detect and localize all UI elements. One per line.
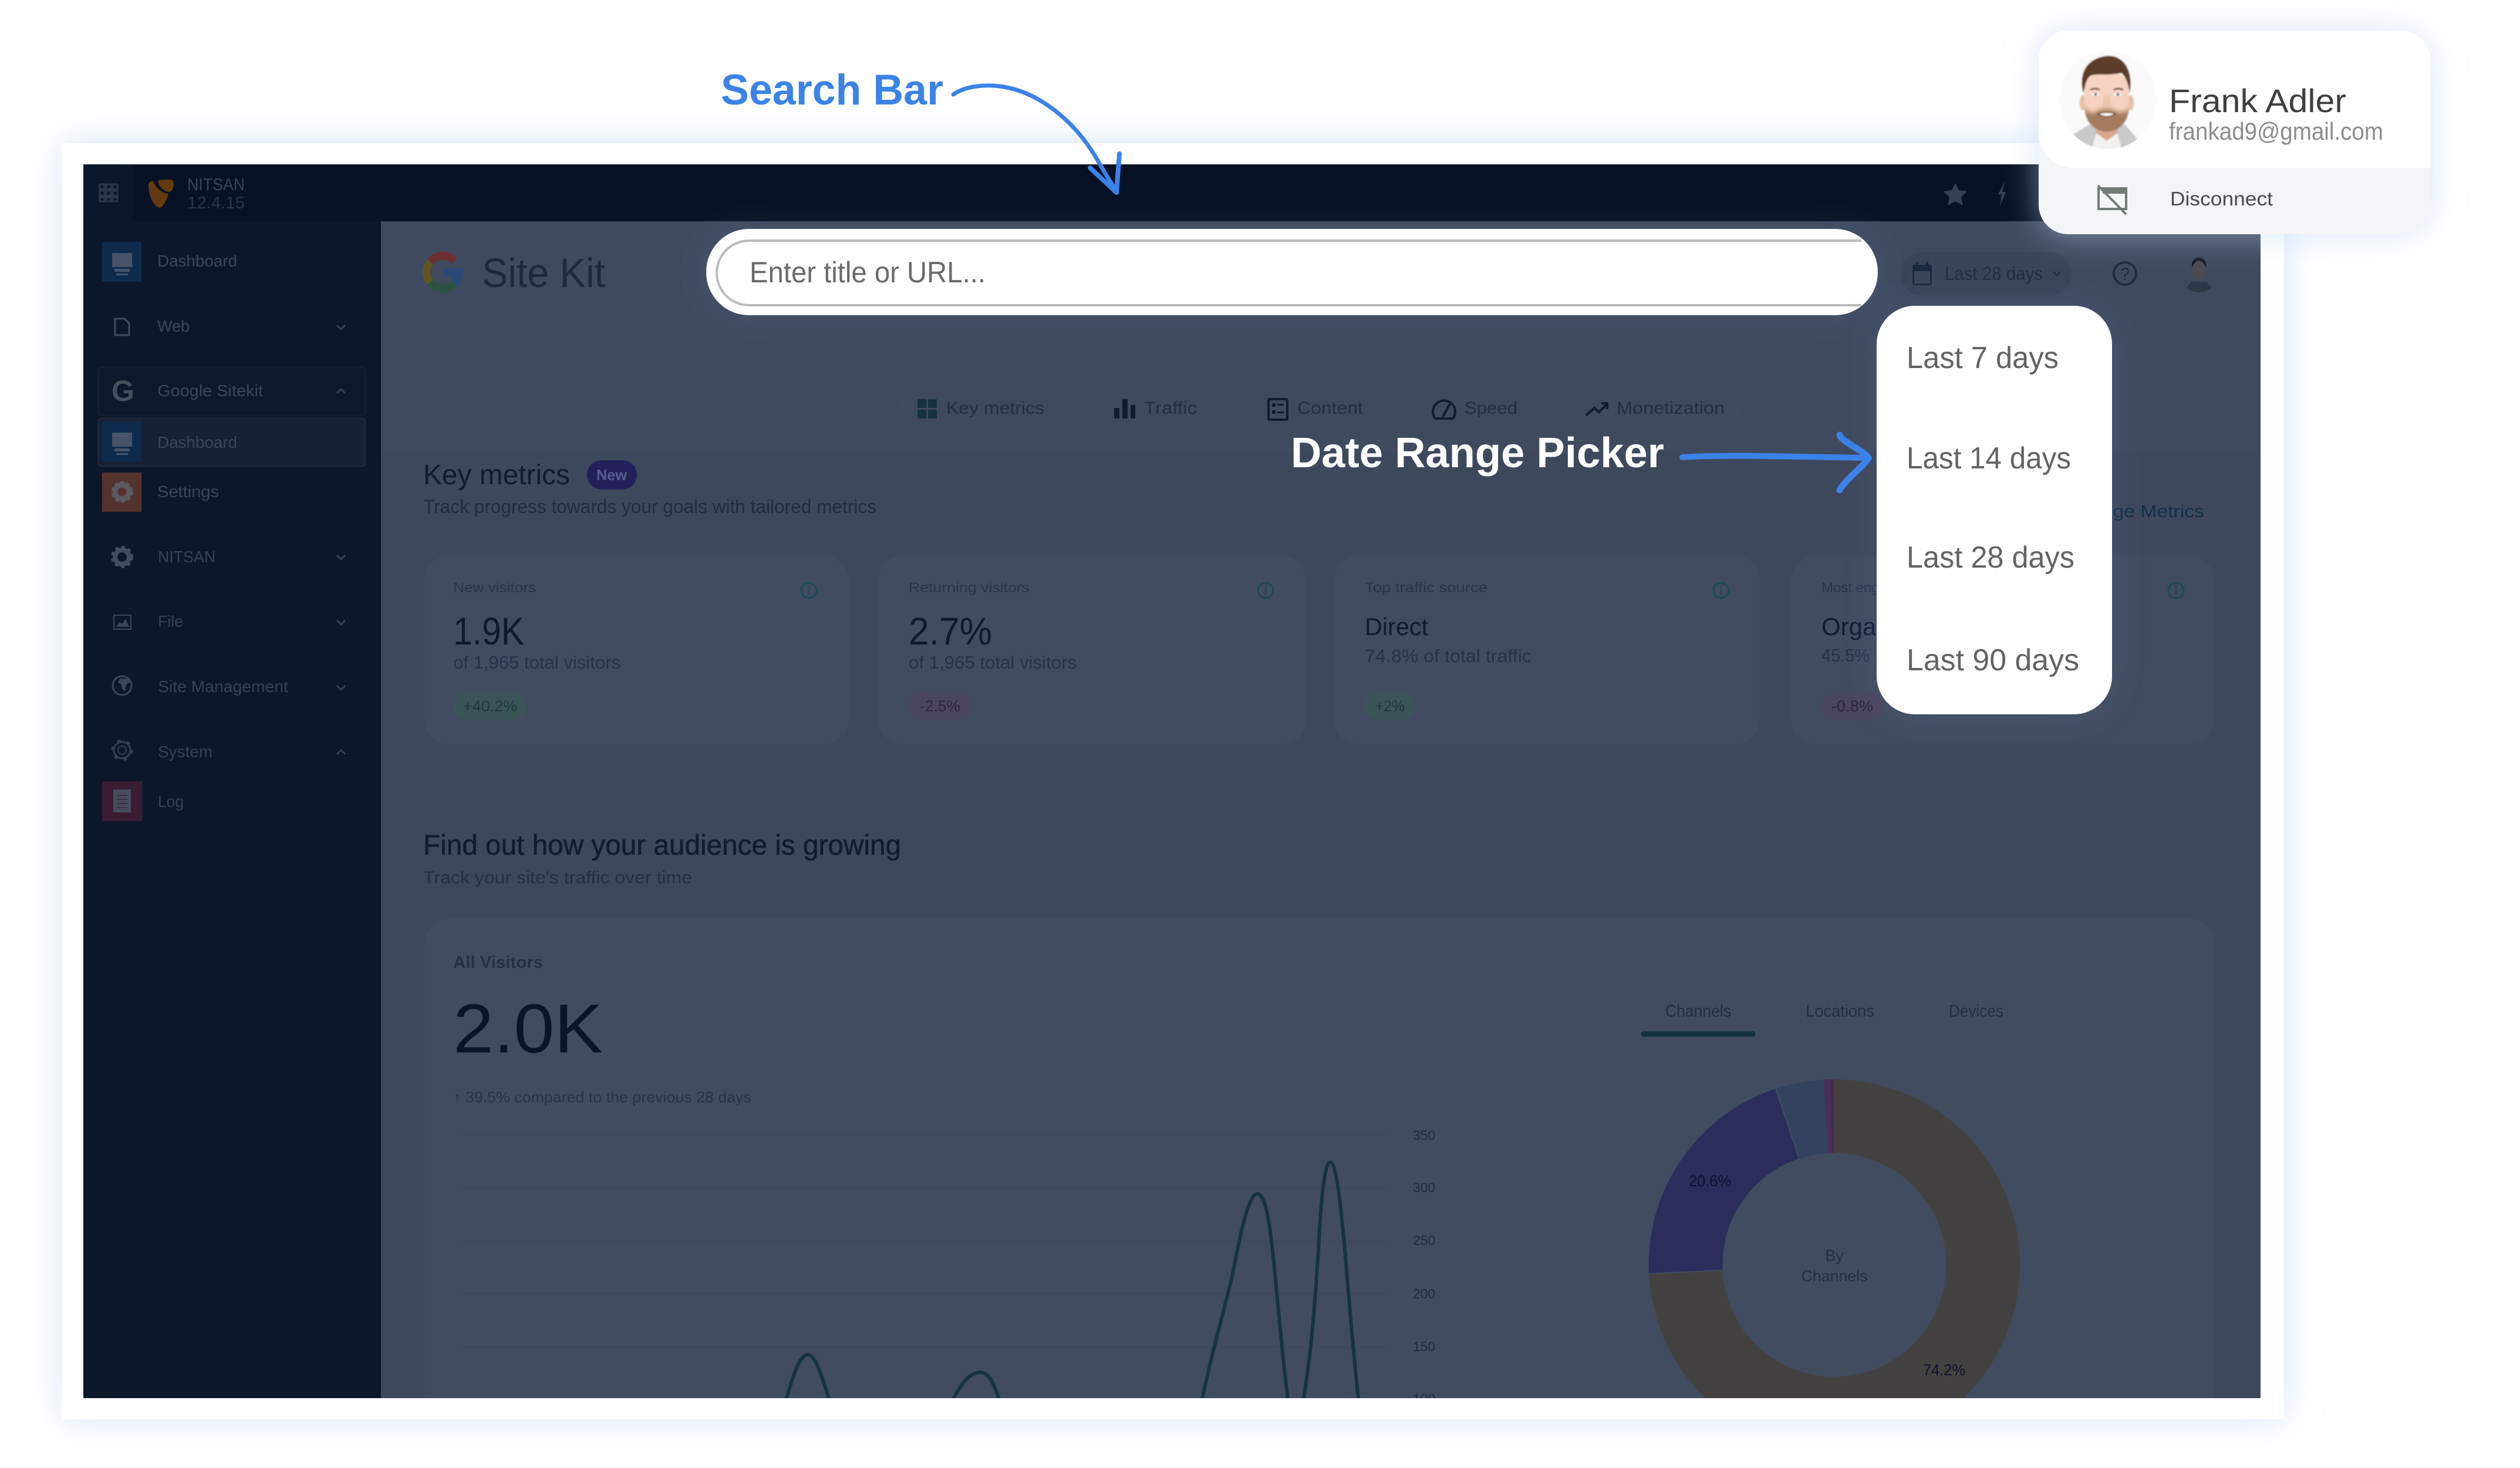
- card: Most engaging channel: Organic: [1821, 613, 1908, 640]
- panel: sidebar: [83, 221, 381, 1398]
- date range button: Last 28 days: [1945, 263, 2043, 284]
- label: All Visitors: All Visitors: [453, 953, 543, 972]
- profile card: [2039, 31, 2430, 234]
- menu item: Google Sitekit: Google Sitekit: [157, 382, 263, 400]
- menu item: Dashboard: Dashboard: [157, 252, 237, 270]
- icon: bolt: [1998, 183, 2006, 206]
- line chart: [461, 1128, 1435, 1420]
- card: Top traffic source: [1334, 556, 1760, 744]
- menu item: Web: Web: [157, 317, 190, 335]
- email: frankad9@gmail.com: [2169, 117, 2383, 145]
- name: Frank Adler: [2169, 82, 2346, 119]
- tab: Content: Content: [1297, 399, 1364, 418]
- donut tabs: Locations: [1806, 1002, 1874, 1021]
- menu item: Log: [102, 781, 184, 821]
- menu item: Settings: Settings: [157, 482, 219, 501]
- donut tabs: Devices: [1949, 1002, 2003, 1021]
- tab: Monetization: Monetization: [1617, 399, 1725, 418]
- menu item: Dashboard: [102, 242, 237, 282]
- date range dropdown: Last 7 days: [1907, 341, 2059, 375]
- date range dropdown: Last 90 days: [1907, 643, 2079, 677]
- tab: Traffic: [1093, 386, 1215, 433]
- donut chart: 74.2%: [1923, 1361, 1965, 1379]
- card: Top traffic source: Top traffic source: [1365, 580, 1487, 596]
- avatar photo: [2059, 50, 2157, 150]
- menu item: Google Sitekit: G: [112, 374, 134, 407]
- menu item: Dashboard selected: Dashboard: [157, 433, 237, 451]
- menu item: File: File: [158, 612, 183, 630]
- card: Returning visitors: Returning visitors: [909, 580, 1030, 596]
- tab: Content: [1247, 386, 1381, 433]
- card: New visitors: [424, 556, 849, 744]
- tab: Speed: Speed: [1465, 399, 1517, 418]
- donut chart: Channels: [1801, 1267, 1868, 1285]
- arrow: date range: [1682, 435, 1868, 490]
- search bar: Enter title or URL...: [750, 256, 986, 289]
- line chart: 300: [1413, 1180, 1435, 1195]
- callout: Search Bar: Search Bar: [721, 66, 943, 114]
- brand name: NITSAN: [187, 176, 245, 194]
- card: Top traffic source: Direct: [1365, 613, 1428, 640]
- icon: disconnect: [2098, 185, 2126, 214]
- menu item: Web: [115, 317, 345, 335]
- outer white frame: [62, 143, 2284, 1419]
- heading: Key metrics: Key metrics: [423, 460, 570, 491]
- comparison text: ↑ 39.5% compared to the previous 28 days: [453, 1088, 751, 1106]
- date range dropdown: Last 14 days: [1907, 441, 2071, 475]
- card: Most engaging channel: Most engaged: [1821, 580, 1911, 596]
- link: Change Metrics: Change Metrics: [2066, 502, 2204, 521]
- panel: main content: [381, 221, 2261, 1450]
- subtitle: Key metrics: Track progress towards your goals with tailored metrics: [423, 496, 876, 517]
- panel: top header bar: [83, 164, 2261, 221]
- date range button: [1912, 262, 2061, 285]
- card: Most engaging channel: [1791, 556, 2214, 744]
- icon: Google G logo: [427, 256, 458, 288]
- line chart: 250: [1413, 1233, 1435, 1248]
- card: Top traffic source: +2%: [1375, 697, 1405, 715]
- tab: Speed: [1413, 386, 1535, 433]
- tab: Key metrics: [896, 386, 1063, 433]
- icon: help: ?: [2120, 265, 2130, 284]
- menu item: Site Management: [113, 676, 345, 696]
- icon: TYPO3 logo: [149, 180, 174, 208]
- line chart: 200: [1413, 1286, 1435, 1301]
- badge: New: New: [596, 466, 628, 484]
- menu item: NITSAN: [112, 547, 345, 567]
- tab: Key metrics: Key metrics: [946, 399, 1044, 418]
- date range dropdown: Last 28 days: [1907, 541, 2074, 575]
- menu item: Dashboard selected: [99, 418, 365, 466]
- donut tabs: [1641, 1002, 2003, 1037]
- card: New visitors: 1.9K: [453, 609, 524, 653]
- tab: Traffic: Traffic: [1144, 399, 1197, 418]
- card: Returning visitors: 2.7%: [909, 609, 992, 653]
- heading: audience: Find out how your audience is growing: [423, 830, 901, 861]
- menu item: Site Management: Site Management: [158, 677, 288, 696]
- logo text: Site Kit: [482, 250, 605, 296]
- tabs row: [896, 386, 1743, 433]
- icon: star: [1944, 183, 1967, 205]
- donut chart: 20.6%: [1689, 1172, 1731, 1190]
- card: Returning visitors: of 1,965 total visitors: [909, 652, 1077, 673]
- card: Returning visitors: -2.5%: [920, 697, 960, 715]
- subtitle: audience: Track your site's traffic over time: [423, 868, 692, 887]
- big number: 2.0K: [453, 990, 603, 1068]
- menu item: Google Sitekit: [99, 367, 365, 416]
- donut tabs: Channels: [1665, 1002, 1731, 1021]
- menu item: Settings: [102, 473, 219, 512]
- card: New visitors: New visitors: [453, 580, 536, 596]
- card: Most engaging channel: -0.8%: [1831, 697, 1873, 715]
- panel: all visitors card: [424, 919, 2214, 1450]
- donut chart: By: [1825, 1247, 1844, 1264]
- disconnect label: Disconnect: [2170, 188, 2273, 210]
- icon: small avatar: [2186, 257, 2212, 292]
- menu item: System: System: [158, 743, 212, 761]
- arrow: search bar: [953, 86, 1119, 193]
- line chart: 100: [1413, 1391, 1435, 1406]
- date range dropdown: [1877, 306, 2112, 714]
- version: 12.4.15: [187, 194, 245, 212]
- tab: Monetization: [1566, 386, 1743, 433]
- search bar: [706, 229, 1878, 315]
- line chart: 150: [1413, 1339, 1435, 1354]
- badge: New: [587, 460, 637, 490]
- card: Most engaging channel: 45.5%: [1821, 645, 1870, 666]
- card: Top traffic source: 74.8% of total traffic: [1365, 646, 1531, 666]
- icon: menu grid: [100, 184, 117, 201]
- line chart: 350: [1413, 1128, 1435, 1143]
- menu item: File: [114, 612, 345, 630]
- icon: help: [2114, 262, 2136, 285]
- callout: Date Range Picker: Date Range Picker: [1291, 430, 1664, 477]
- card: New visitors: of 1,965 total visitors: [453, 652, 620, 673]
- card: New visitors: +40.2%: [463, 697, 517, 715]
- card: Returning visitors: [878, 556, 1306, 744]
- menu item: Log: Log: [158, 792, 184, 811]
- menu item: System: [112, 740, 345, 761]
- donut chart: [1649, 1079, 2020, 1450]
- menu item: NITSAN: NITSAN: [158, 548, 215, 566]
